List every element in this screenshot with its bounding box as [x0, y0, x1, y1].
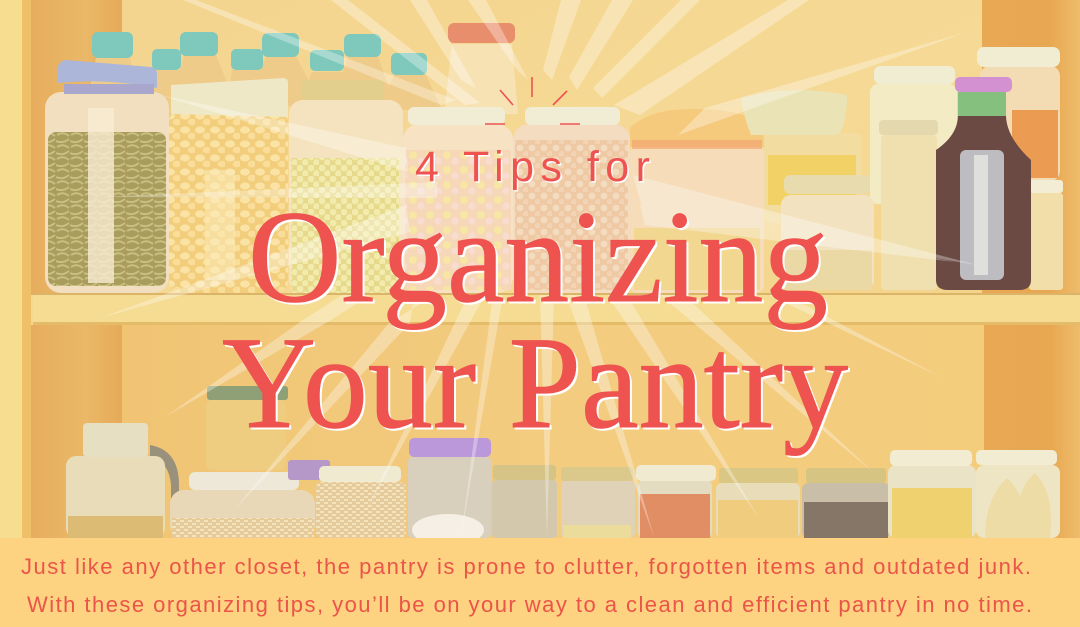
icon: yellow pasta jar [888, 450, 976, 538]
icon: tin and yellow jar [741, 90, 862, 223]
sunburst rays [100, 0, 977, 537]
icon: pasta jar with blue lid [45, 60, 169, 293]
icon: gold-lid jar [781, 175, 874, 290]
icon: dark spice jar [802, 468, 890, 538]
icon: tall spice jar [879, 120, 938, 290]
icon: cream canister with white lid [870, 66, 957, 204]
icon: cereal jar [403, 107, 513, 293]
icon: small purple lid [288, 460, 330, 480]
sparkle accent above heading [485, 77, 580, 124]
icon: syrup pitcher [66, 423, 179, 538]
intro text: With these organizing tips, you’ll be on your way to a clean and efficient pantry in no time. [27, 592, 1032, 617]
title: Organizing: Organizing [248, 183, 828, 330]
icon: clamp jar [492, 465, 557, 538]
icon: tall bottle with red lid [444, 23, 518, 114]
icon: lentil jar [636, 465, 716, 538]
icon: pea jar with gold lid [289, 80, 403, 293]
bottom shelf jars [66, 386, 1060, 546]
title: Your Pantry: Your Pantry [224, 311, 850, 458]
intro band [0, 538, 1080, 627]
icon: stacked jar with green lid [206, 386, 288, 470]
icon: jar with orange spice [977, 47, 1060, 181]
subtitle: 4 Tips for: 4 Tips for [416, 144, 652, 192]
icon: noodle jar [716, 468, 800, 538]
top shelf jars [45, 23, 1063, 293]
icon: small jar, lower right [1029, 180, 1063, 290]
icon: large jar with white lid [170, 472, 315, 538]
icon: jar with orange lid [630, 109, 764, 293]
icon: peanut jar with white lid [169, 78, 288, 293]
icon: dark bottle [936, 77, 1031, 290]
icon: teal-capped bottles [90, 32, 442, 126]
title: Organizing: Organizing [250, 185, 830, 332]
subtitle: 4 Tips for: 4 Tips for [415, 143, 650, 191]
icon: salt jar with purple lid [408, 438, 491, 546]
icon: gold-lid jar with nuts [561, 467, 635, 538]
intro text [21, 554, 1032, 617]
icon: oats jar [316, 466, 406, 538]
title: Your Pantry: Your Pantry [222, 309, 848, 456]
shelf board [33, 293, 1080, 325]
icon: bay leaf jar [976, 450, 1060, 538]
icon: chickpea jar [513, 107, 630, 293]
intro text: Just like any other closet, the pantry is prone to clutter, forgotten items and outdated junk. [21, 554, 1031, 579]
